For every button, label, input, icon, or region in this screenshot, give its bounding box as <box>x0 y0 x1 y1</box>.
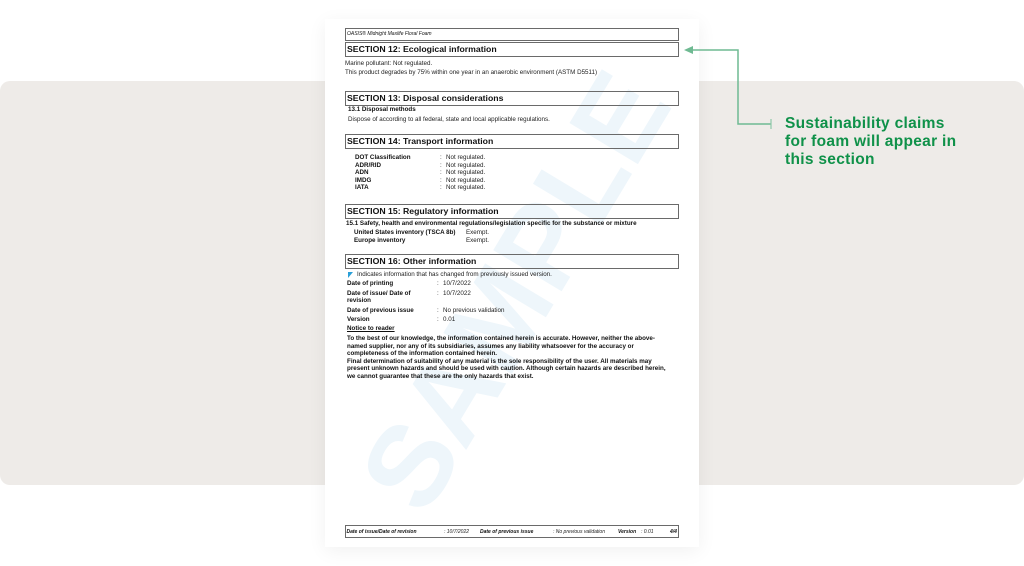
table: transport classifications: : <box>440 184 442 191</box>
panel: safety data sheet page <box>325 19 699 547</box>
table: transport classifications: : <box>440 154 442 161</box>
table: document dates: : <box>437 307 439 314</box>
table: transport classifications: IMDG <box>355 177 371 184</box>
table: transport classifications: DOT Classification <box>355 154 411 161</box>
footer box: Date of previous issue <box>480 528 533 534</box>
table: document dates: Date of printing <box>347 280 393 287</box>
heading: section 14 <box>345 134 679 149</box>
callout: sustainability claims <box>785 115 956 168</box>
table: document dates: No previous validation <box>443 307 504 314</box>
table: transport classifications: ADN <box>355 169 369 176</box>
footer box: Version <box>618 528 636 534</box>
callout: sustainability claims: this section <box>785 151 875 168</box>
table: document dates: : <box>437 280 439 287</box>
table: document dates: Date of previous issue <box>347 307 414 314</box>
footer box: : No previous validation <box>553 528 605 534</box>
panel: grey background band <box>0 81 1024 485</box>
table: document dates <box>347 280 504 323</box>
footer box: : 0.01 <box>641 528 654 534</box>
heading: section 12: SECTION 12: Ecological information <box>347 44 497 54</box>
text: section 15 body: Exempt. <box>466 237 489 244</box>
heading: section 14: SECTION 14: Transport information <box>347 136 493 146</box>
text: section 12 body: Marine pollutant: Not regulated. <box>345 60 432 67</box>
footer box: Date of issue/Date of revision <box>346 528 417 534</box>
text: change marker legend: Indicates information that has changed from previously issued version. <box>357 271 552 278</box>
text: section 13 body: Dispose of according to all federal, state and local applicable regulations. <box>348 116 550 123</box>
table: transport classifications: Not regulated. <box>446 177 485 184</box>
text: notice to reader body: Final determination of suitability of any material is the sole responsibility of the user. All materials may <box>347 358 652 364</box>
table: transport classifications <box>355 154 485 191</box>
table: document dates: Version <box>347 316 370 323</box>
table: transport classifications: Not regulated. <box>446 169 485 176</box>
footer box: : 10/7/2022 <box>444 528 469 534</box>
text: notice to reader body: named supplier, nor any of its subsidiaries, assumes any liability whatsoever for the accuracy or <box>347 342 634 350</box>
heading: notice to reader: Notice to reader <box>347 325 395 332</box>
heading: section 16: SECTION 16: Other information <box>347 256 476 266</box>
heading: section 12 <box>345 42 679 57</box>
text: section 13 body: 13.1 Disposal methods <box>348 106 416 113</box>
table: transport classifications: : <box>440 169 442 176</box>
table: transport classifications: IATA <box>355 184 369 191</box>
text: notice to reader body: we cannot guarantee that these are the only hazards that exist. <box>347 372 534 380</box>
table: transport classifications: ADR/RID <box>355 162 381 169</box>
table: document dates: : <box>437 290 439 297</box>
table: transport classifications: Not regulated. <box>446 154 485 161</box>
text: section 15 body: 15.1 Safety, health and environmental regulations/legislation specific for the substance or mixture <box>346 220 637 227</box>
heading: section 13 <box>345 91 679 106</box>
arrow: callout pointer to section 12 <box>684 46 772 129</box>
callout: sustainability claims: for foam will appear in <box>785 133 956 150</box>
heading: section 13: SECTION 13: Disposal considerations <box>347 93 503 103</box>
text: section 12 body <box>345 60 597 76</box>
table: transport classifications: Not regulated. <box>446 184 485 191</box>
watermark: SAMPLE: SAMPLE <box>335 50 695 532</box>
text: notice to reader body <box>347 335 666 380</box>
footer box <box>345 525 679 538</box>
table: document dates: 10/7/2022 <box>443 290 471 297</box>
table: transport classifications: Not regulated. <box>446 162 485 169</box>
text: section 13 body <box>348 106 550 123</box>
text: notice to reader body: To the best of our knowledge, the information contained herein is accurate. However, neither the above- <box>347 335 655 342</box>
text: notice to reader body: present unknown hazards and should be used with caution. Although certain hazards are described herein, <box>347 365 666 372</box>
heading: section 15: SECTION 15: Regulatory information <box>347 206 499 216</box>
table: document dates: revision <box>347 297 371 304</box>
table: transport classifications: : <box>440 177 442 184</box>
footer box: 4/4 <box>670 528 677 534</box>
icon: change marker <box>348 272 353 278</box>
text: section 12 body: This product degrades by 75% within one year in an anaerobic environment (ASTM D5511) <box>345 69 597 76</box>
heading: section 15 <box>345 204 679 219</box>
table: document dates: Date of issue/ Date of <box>347 290 411 297</box>
text: notice to reader body: completeness of the information contained herein. <box>347 350 497 357</box>
text: section 15 body: Europe inventory <box>354 237 405 244</box>
document title box: OASIS® Midnight Maxlife Floral Foam <box>347 31 432 37</box>
table: transport classifications: : <box>440 162 442 169</box>
table: document dates: : <box>437 316 439 323</box>
text: section 15 body: United States inventory (TSCA 8b) <box>354 229 456 236</box>
callout: sustainability claims: Sustainability claims <box>785 115 945 132</box>
document title box <box>345 28 679 41</box>
heading: section 16 <box>345 254 679 269</box>
text: section 15 body <box>346 220 637 244</box>
table: document dates: 10/7/2022 <box>443 280 471 287</box>
text: section 15 body: Exempt. <box>466 229 489 236</box>
table: document dates: 0.01 <box>443 316 455 323</box>
